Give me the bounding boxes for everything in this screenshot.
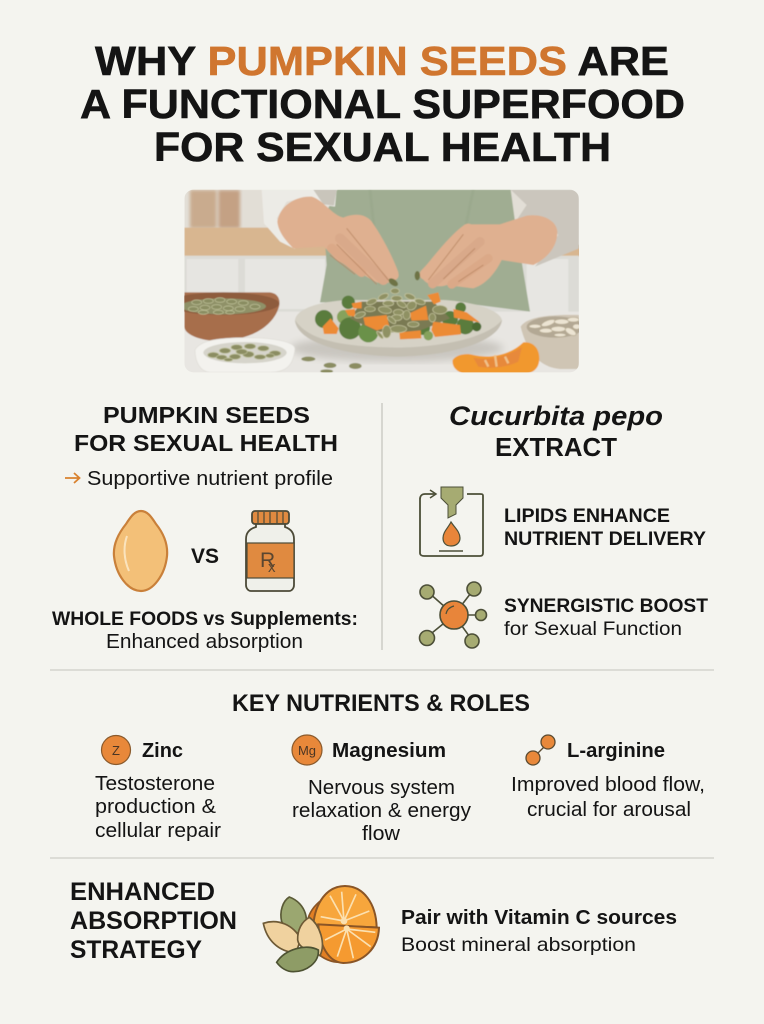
photo: hands sprinkling pumpkin seeds on a salad (167, 190, 583, 373)
panel: L-arginine (511, 735, 705, 821)
lipids text: NUTRIENT DELIVERY (504, 529, 706, 550)
zinc description: cellular repair (95, 820, 221, 842)
magnesium description: relaxation & energy (292, 800, 471, 822)
wooden bowl (184, 292, 280, 341)
icon: molecule (420, 582, 486, 648)
pair with vitamin C text (401, 906, 677, 956)
supportive nutrient profile text: Supportive nutrient profile (87, 468, 333, 490)
heading: enhanced absorption strategy (70, 878, 237, 964)
pair with vitamin C text: Boost mineral absorption (401, 934, 636, 956)
panel: zinc (95, 736, 221, 842)
icon: two-node molecule (526, 735, 555, 765)
arrow (65, 473, 80, 483)
synergistic boost text: for Sexual Function (504, 618, 682, 640)
icon: Z badge: Z (112, 743, 120, 758)
zinc description: Testosterone (95, 773, 215, 795)
heading: Cucurbita pepo extract: EXTRACT (495, 432, 617, 462)
left arm and hand (277, 197, 398, 284)
icon: Rx supplement bottle: x (268, 559, 276, 576)
left sleeve (262, 190, 337, 249)
synergistic boost text: SYNERGISTIC BOOST (504, 596, 708, 617)
heading: pumpkin seeds for sexual health: FOR SEXUAL HEALTH (74, 430, 338, 456)
salad: pumpkin seeds (354, 288, 447, 340)
pair with vitamin C text: Pair with Vitamin C sources (401, 906, 677, 929)
magnesium description: flow (362, 823, 401, 845)
L-arginine description: Improved blood flow, (511, 774, 705, 796)
heading: pumpkin seeds for sexual health: PUMPKIN SEEDS (103, 402, 310, 428)
heading: key nutrients and roles: KEY NUTRIENTS & ROLES (232, 690, 530, 717)
icon: pumpkin seeds and orange slices (263, 886, 379, 972)
vs label: VS (191, 545, 219, 568)
synergistic boost text (504, 596, 708, 640)
pumpkin wedge (453, 342, 539, 373)
icon: Mg badge (292, 735, 322, 765)
heading: Cucurbita pepo extract: Cucurbita pepo (449, 401, 663, 431)
salad: squash (323, 292, 480, 339)
zinc description (95, 773, 221, 842)
title: A FUNCTIONAL SUPERFOOD (80, 81, 685, 127)
small white bowl (195, 338, 295, 372)
panel: magnesium (292, 735, 471, 845)
lipids text: LIPIDS ENHANCE (504, 506, 670, 527)
icon: Rx supplement bottle: R (260, 549, 275, 572)
magnesium label: Magnesium (332, 740, 446, 762)
whole foods vs supplements text (52, 609, 358, 653)
heading: Cucurbita pepo extract (449, 401, 663, 462)
title: FOR SEXUAL HEALTH (154, 124, 611, 170)
heading: pumpkin seeds for sexual health (74, 402, 338, 456)
heading: enhanced absorption strategy: ENHANCED (70, 878, 215, 906)
right sleeve (511, 190, 579, 267)
zinc label: Zinc (142, 740, 183, 762)
L-arginine description (511, 774, 705, 821)
seeds bowl at right (521, 315, 579, 369)
icon: Mg badge: Mg (298, 743, 316, 758)
icon: pumpkin seed (114, 511, 167, 591)
lipids text (504, 506, 706, 550)
heading: enhanced absorption strategy: STRATEGY (70, 936, 202, 964)
loose seeds (301, 357, 362, 373)
whole foods vs supplements text: Enhanced absorption (106, 631, 303, 653)
icon: Rx supplement bottle (246, 511, 294, 591)
L-arginine label: L-arginine (567, 740, 665, 762)
icon: extraction funnel and drop (420, 487, 483, 556)
magnesium description (292, 777, 471, 845)
apron (320, 190, 530, 312)
zinc description: production & (95, 796, 217, 818)
title (80, 38, 685, 170)
title: WHY PUMPKIN SEEDS ARE (95, 38, 669, 84)
salad: broccoli (315, 296, 481, 342)
magnesium description: Nervous system (308, 777, 455, 799)
panel: pumpkin seeds for sexual health (52, 402, 358, 653)
whole foods vs supplements text: WHOLE FOODS vs Supplements: (52, 609, 358, 630)
right arm and hand (421, 215, 557, 288)
heading: enhanced absorption strategy: ABSORPTION (70, 907, 237, 935)
panel: Cucurbita pepo extract (420, 401, 708, 648)
L-arginine description: crucial for arousal (527, 799, 691, 821)
plate (295, 300, 502, 348)
shadow under bowl and plate (290, 335, 503, 362)
